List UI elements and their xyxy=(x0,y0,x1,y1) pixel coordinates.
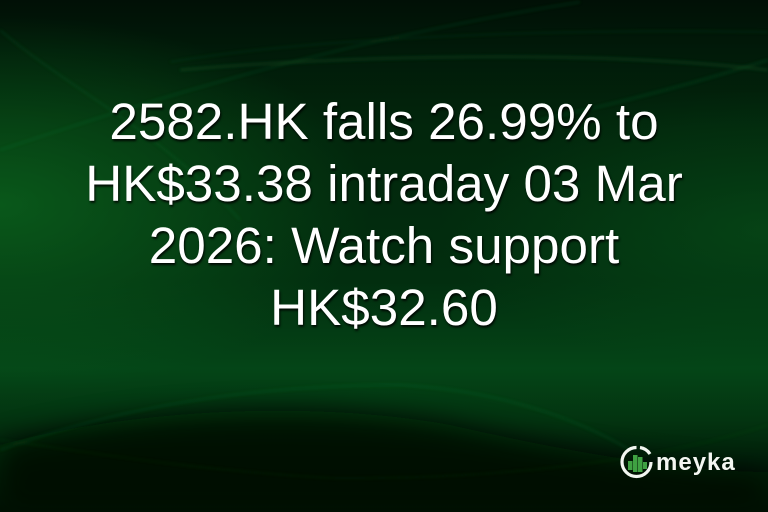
logo: meyka xyxy=(620,446,736,478)
title: headline xyxy=(85,93,684,336)
title: headline: 2582.HK falls 26.99% to xyxy=(109,93,659,150)
title: headline: 2026: Watch support xyxy=(149,217,619,274)
icon: ring with bars xyxy=(622,448,651,476)
title: headline: HK$32.60 xyxy=(270,279,498,336)
title: headline: HK$33.38 intraday 03 Mar xyxy=(85,155,683,212)
logo wordmark: meyka xyxy=(656,449,736,476)
